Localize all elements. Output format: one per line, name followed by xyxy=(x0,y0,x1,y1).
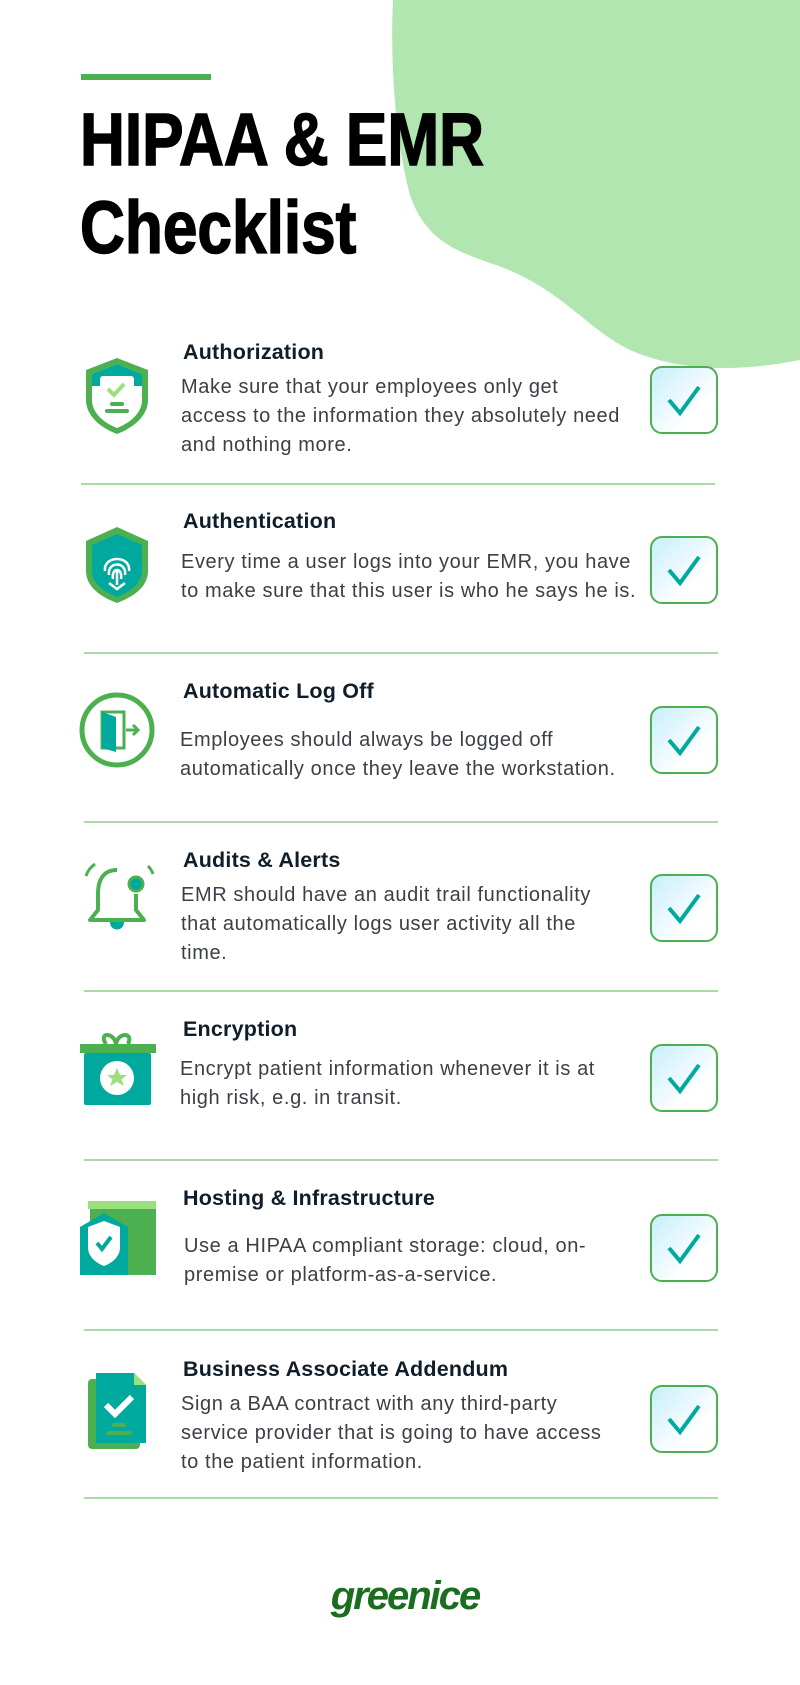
checkbox xyxy=(650,706,718,774)
row: Hosting & Infrastructure xyxy=(80,1186,718,1286)
row: Authorization xyxy=(86,340,718,456)
row: Authentication xyxy=(86,509,718,604)
text: Employees should always be logged off xyxy=(180,729,553,751)
row: Automatic Log Off xyxy=(80,679,718,780)
checkbox xyxy=(650,1385,718,1453)
title accent bar xyxy=(81,74,211,80)
text: Sign a BAA contract with any third-party xyxy=(181,1393,557,1415)
icon: server shield xyxy=(80,1201,156,1275)
heading: Audits & Alerts xyxy=(183,848,340,872)
text: access to the information they absolutely need xyxy=(181,405,620,427)
text: Make sure that your employees only get xyxy=(181,376,558,398)
title: HIPAA & EMR xyxy=(80,98,484,181)
checkbox xyxy=(650,536,718,604)
checkbox xyxy=(650,1044,718,1112)
text: to make sure that this user is who he says he is. xyxy=(181,580,636,602)
icon: bell xyxy=(84,862,154,930)
text xyxy=(181,884,591,964)
row: Encryption xyxy=(80,1017,718,1112)
row: Audits & Alerts xyxy=(84,848,718,964)
row: Business Associate Addendum xyxy=(88,1357,718,1473)
icon: document check xyxy=(88,1373,146,1449)
title: Checklist xyxy=(80,186,356,269)
text xyxy=(181,376,620,456)
icon: fingerprint shield xyxy=(86,527,148,603)
text xyxy=(180,729,616,780)
heading: Automatic Log Off xyxy=(183,679,374,703)
text xyxy=(181,551,636,602)
text: EMR should have an audit trail functionality xyxy=(181,884,591,906)
text xyxy=(181,1393,602,1473)
icon: door exit xyxy=(80,692,154,768)
checkbox xyxy=(650,1214,718,1282)
title xyxy=(80,98,484,269)
text: high risk, e.g. in transit. xyxy=(180,1087,402,1109)
text: to the patient information. xyxy=(181,1451,423,1473)
text: that automatically logs user activity all the xyxy=(181,913,576,935)
checkbox xyxy=(650,874,718,942)
text: and nothing more. xyxy=(181,434,352,456)
logo: greenice xyxy=(331,1574,479,1618)
heading: Encryption xyxy=(183,1017,297,1041)
text: Every time a user logs into your EMR, you have xyxy=(181,551,631,573)
heading: Authorization xyxy=(183,340,324,364)
text: Use a HIPAA compliant storage: cloud, on- xyxy=(184,1235,586,1257)
text: automatically once they leave the workstation. xyxy=(180,758,616,780)
heading: Authentication xyxy=(183,509,336,533)
icon: gift box xyxy=(80,1033,156,1105)
text: premise or platform-as-a-service. xyxy=(184,1264,497,1286)
checkbox xyxy=(650,366,718,434)
text: Encrypt patient information whenever it is at xyxy=(180,1058,595,1080)
background blob xyxy=(392,0,800,368)
text xyxy=(180,1058,595,1109)
icon: shield check xyxy=(86,358,148,434)
text xyxy=(184,1235,586,1286)
text: time. xyxy=(181,942,227,964)
text: service provider that is going to have access xyxy=(181,1422,602,1444)
heading: Hosting & Infrastructure xyxy=(183,1186,435,1210)
heading: Business Associate Addendum xyxy=(183,1357,508,1381)
